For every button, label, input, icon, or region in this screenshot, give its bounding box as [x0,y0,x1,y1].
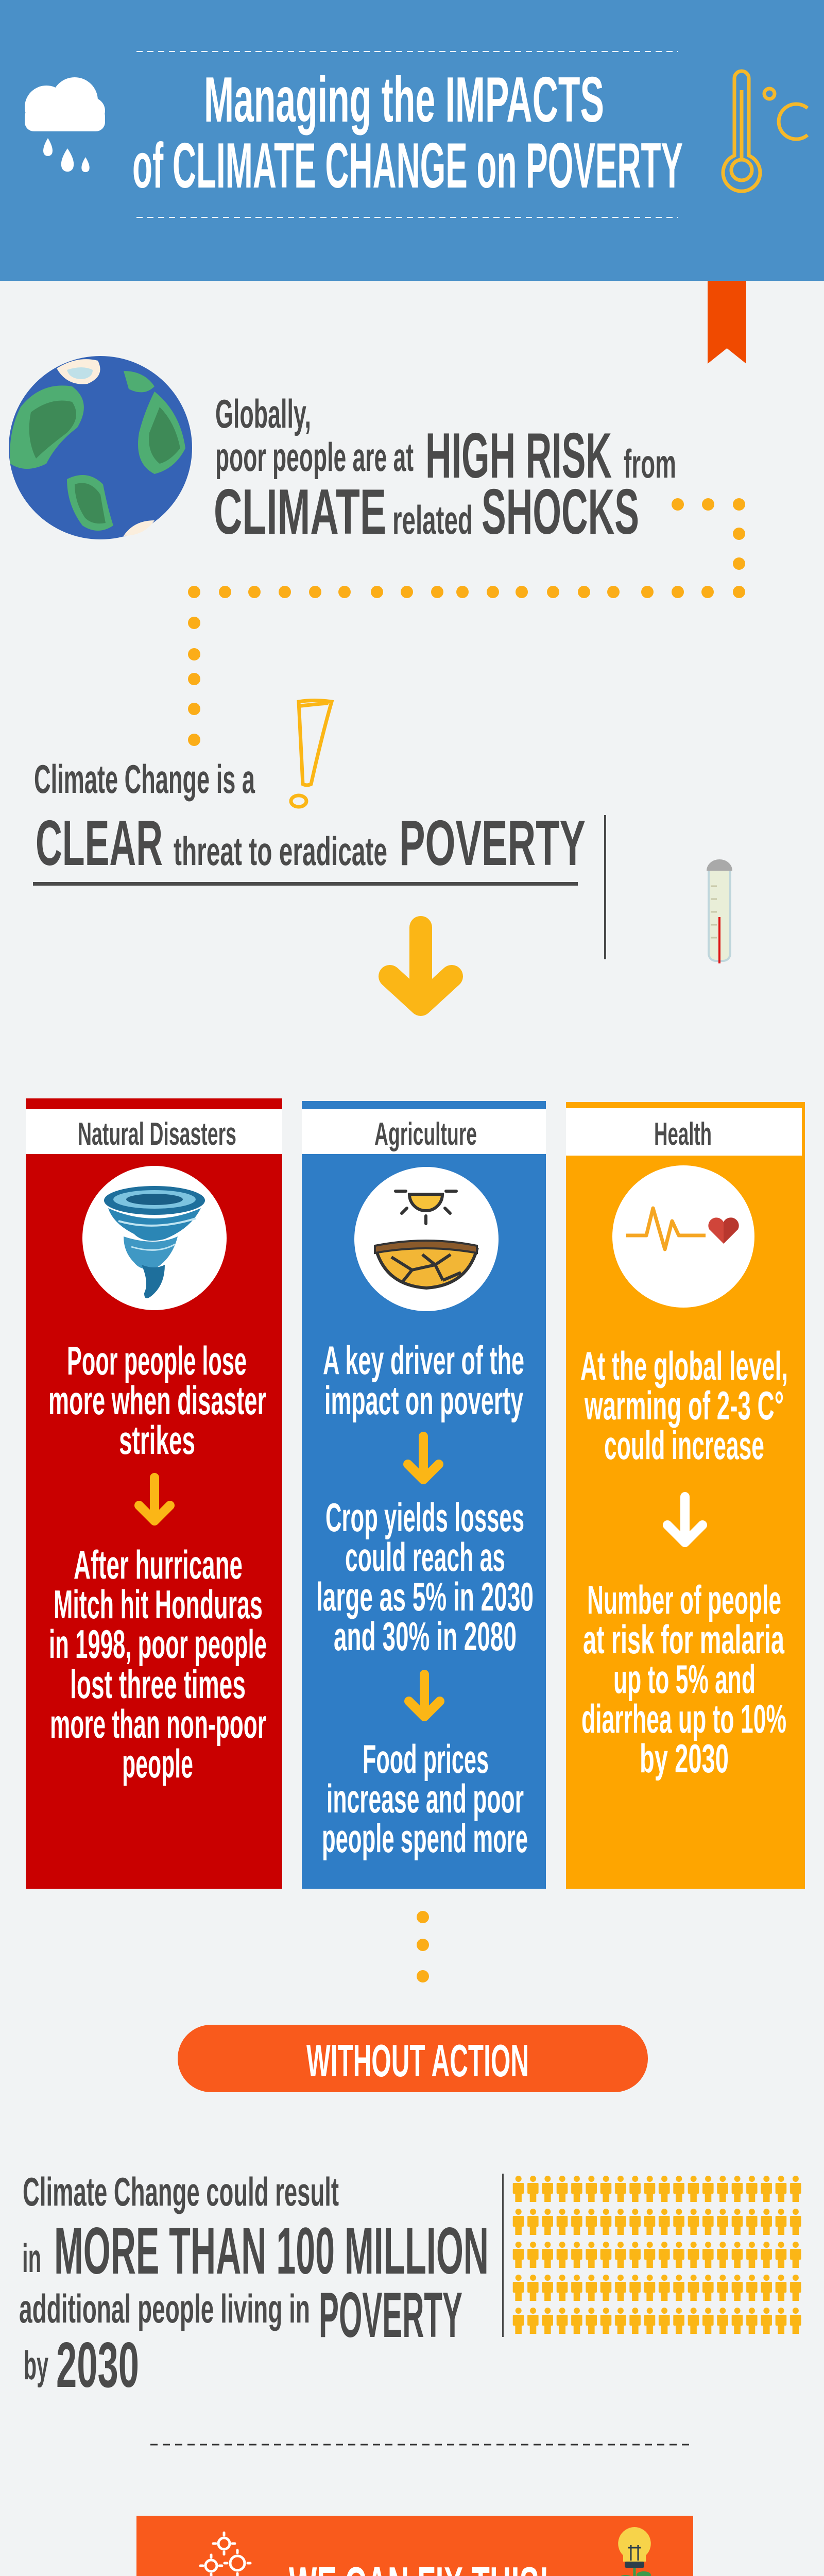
text: key driver [323,1337,524,1423]
text: food prices: people spend more [322,1816,528,1861]
icon: small thermometer [707,859,732,963]
text: hurricane mitch: in 1998, poor people [49,1621,267,1667]
arrow: down [390,927,452,1005]
text: hurricane mitch [49,1542,267,1786]
icon: thermometer celsius [723,71,808,191]
panel: health [566,1102,805,1889]
text: key driver: impact on poverty [324,1378,523,1423]
text: globally high risk: Globally, [215,391,311,436]
arrow: down [409,1674,440,1717]
text: hurricane mitch: After hurricane [74,1542,243,1587]
arrow: down white [667,1497,702,1543]
text: malaria diarrhea [581,1577,786,1781]
icon: light bulb plant [608,2527,660,2576]
text: 100 million in poverty: by [24,2343,48,2388]
text: poor people lose more: more when disaster [48,1378,266,1423]
panel: natural disasters [26,1098,282,1889]
icon: heartbeat [612,1165,754,1308]
text: hurricane mitch: Mitch hit Honduras [54,1582,263,1627]
title [132,64,683,201]
text: clear threat [33,756,586,886]
banner: we can fix this [136,2516,693,2576]
text: food prices: increase and poor [327,1776,524,1821]
panel: agriculture [302,1101,546,1889]
pill: without action: WITHOUT ACTION [306,2035,529,2086]
chart: people pictogram grid [510,2169,802,2334]
text: globally high risk: poor people are at [215,434,414,480]
text: globally high risk [214,391,676,548]
text: globally high risk: SHOCKS [482,477,639,548]
text: 100 million in poverty: POVERTY [319,2280,462,2351]
text: key driver: A key driver of the [323,1337,524,1383]
ribbon bookmark [708,281,746,364]
text: poor people lose more: Poor people lose [67,1338,247,1383]
text: global warming [580,1343,788,1468]
text: crop yields [316,1495,534,1659]
text: crop yields: and 30% in 2080 [334,1614,517,1659]
text: clear threat: threat to eradicate [174,828,387,874]
text: hurricane mitch: more than non-poor [50,1701,266,1747]
text: 100 million in poverty: 2030 [56,2330,139,2401]
dotted connector path [188,498,745,746]
text: clear threat: POVERTY [399,808,586,879]
icon: tornado [82,1166,227,1310]
heading: agriculture: Agriculture [374,1116,477,1152]
text: 100 million in poverty: in [22,2235,41,2281]
text: poor people lose more [48,1338,266,1463]
text: 100 million in poverty [19,2169,489,2401]
heading: natural disasters: Natural Disasters [78,1116,236,1152]
text: globally high risk: from [624,441,676,486]
text: globally high risk: CLIMATE [214,477,386,548]
text: food prices: Food prices [363,1736,489,1782]
text: 100 million in poverty: Climate Change could result [23,2169,339,2214]
text: 100 million in poverty: additional people living in [19,2286,310,2331]
text: globally high risk: related [392,497,473,543]
text: crop yields: large as 5% in 2030 [316,1574,534,1619]
icon: rain cloud [25,77,105,172]
dotted connector [417,1911,429,1982]
text: crop yields: could reach as [345,1534,505,1580]
text: hurricane mitch: people [122,1741,193,1786]
text: crop yields: Crop yields losses [325,1495,524,1540]
icon: globe [9,356,192,539]
icon: exclamation mark [291,701,332,807]
text: food prices [322,1736,528,1861]
icon: sun and cracked soil [354,1167,499,1311]
heading: health: Health [654,1116,712,1152]
text: malaria diarrhea: by 2030 [640,1736,729,1781]
icon: thinking person with gears [161,2533,250,2576]
header banner [0,0,824,281]
text: poor people lose more: strikes [119,1417,195,1463]
arrow: down [139,1478,170,1521]
text: hurricane mitch: lost three times [70,1662,246,1707]
pill: without action [178,2025,648,2092]
text: globally high risk: HIGH RISK [425,420,612,492]
arrow: down [408,1436,439,1480]
text: clear threat: CLEAR [36,808,163,879]
text: clear threat: Climate Change is a [34,756,255,802]
